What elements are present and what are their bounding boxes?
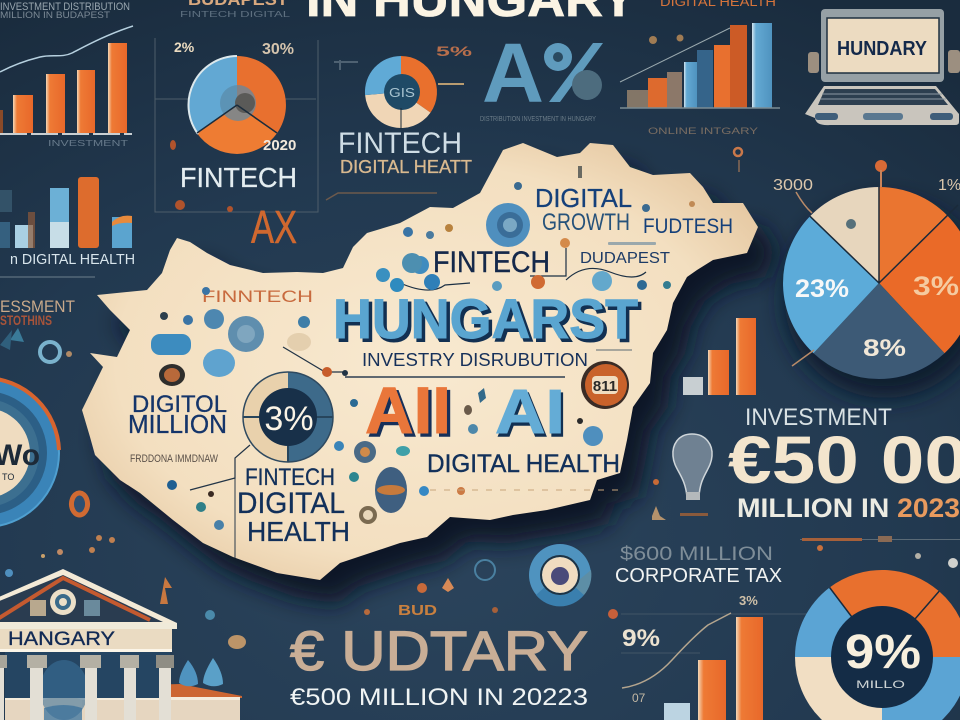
panel: fintech pie: 2% (174, 39, 195, 55)
fudtesh label: FUDTESH (643, 215, 733, 238)
finntech label: FINNTECH (202, 287, 313, 306)
text: corporate tax: $600 MILLION (620, 544, 773, 565)
donut chart: bottom right (795, 570, 960, 720)
callout: investment: €50 00 (728, 423, 960, 498)
entablature sign (0, 623, 177, 652)
left text block (0, 297, 75, 328)
pie labels: 3% (913, 271, 959, 301)
back building (5, 626, 242, 720)
pie labels: 23% (795, 275, 849, 303)
headline: budget: €500 MILLION IN 20223 (290, 684, 588, 711)
digital growth label (535, 183, 632, 236)
pie labels (773, 177, 960, 362)
icon: left round badge (0, 378, 59, 527)
fintech label upper: FINTECH (433, 246, 550, 279)
map heading: HUNGARST (336, 290, 641, 353)
callout: investment: INVESTMENT (745, 404, 892, 431)
panel: fintech donut: GIS (389, 85, 415, 100)
digital health label: DIGITAL HEALTH (427, 450, 620, 478)
donut chart: bottom right: MILLO (856, 679, 906, 691)
AI blue: AI (495, 378, 565, 447)
icon: temple building (0, 569, 242, 720)
icon: orange coin: 811 (593, 378, 617, 395)
pie chart: large right (773, 160, 960, 398)
digitol million label: DIGITOL (132, 391, 227, 418)
top small headings: FINTECH DIGITAL (180, 10, 291, 19)
pie labels: 3000 (773, 177, 813, 194)
AI blue: AI (497, 381, 567, 450)
3% donut (243, 372, 333, 462)
pediment (0, 569, 177, 628)
fintech digital health label (237, 464, 350, 547)
text: corporate tax: CORPORATE TAX (615, 565, 782, 587)
left text block: ESSMENT (0, 297, 75, 316)
bar chart: bottom right: 9% (622, 625, 660, 652)
icon: blue ring (486, 203, 530, 247)
bar chart: top right (620, 23, 780, 136)
small accents (0, 328, 960, 649)
fintech label: FINTECH (338, 127, 462, 160)
panel: fintech pie: 2020 (263, 137, 296, 154)
text: corporate tax (615, 544, 782, 587)
panel: fintech pie (155, 38, 318, 253)
digitol million label (128, 391, 227, 465)
budapest label: DUDAPEST (580, 250, 670, 267)
donut value: 9% (845, 626, 921, 679)
laptop screen text: HUNDARY (837, 38, 928, 60)
digitol million label: MILLION (128, 409, 227, 439)
bar chart: top left (0, 26, 133, 148)
callout: investment: MILLION IN 2023 (737, 493, 960, 523)
fintech digital health label: FINTECH (245, 464, 335, 491)
big A% mark: A (482, 26, 544, 120)
map drop shadow (100, 167, 776, 604)
icon: orange coin (581, 361, 629, 409)
bar chart: bottom right: 07 (632, 691, 646, 705)
label: digital health: n DIGITAL HEALTH (10, 251, 135, 268)
AI orange: AII (368, 376, 454, 450)
map subheading: INVESTRY DISRUBUTION (362, 350, 588, 370)
fintech digital health label: HEALTH (247, 516, 350, 547)
entablature sign: HANGARY (8, 629, 115, 650)
icon: laptop (805, 9, 960, 125)
digital growth label: GROWTH (542, 209, 630, 236)
headline: budget (290, 602, 588, 711)
panel: fintech donut: 5% (436, 43, 473, 59)
top small headings: INVESTMENT DISTRIBUTION (0, 1, 130, 13)
big A% mark (480, 26, 603, 123)
3% donut: 3% (264, 400, 314, 438)
map of Hungary (82, 143, 758, 580)
digital label: DIGITAL HEATT (340, 157, 472, 177)
digital growth label: DIGITAL (535, 183, 632, 213)
panel: fintech donut (326, 43, 473, 200)
digitol million label: FRDDONA IMMDNAW (130, 453, 218, 465)
map pins and connectors (151, 166, 695, 530)
panel: fintech pie: 30% (262, 41, 294, 58)
bar chart: top left: INVESTMENT (48, 139, 128, 148)
icon: circular target (529, 544, 591, 606)
AX mark: AX (251, 201, 297, 253)
headline: budget: € UDTARY (290, 619, 588, 682)
bar chart: middle right (683, 318, 756, 395)
fintech digital health label: DIGITAL (237, 487, 345, 520)
fintech label: FINTECH (180, 162, 297, 193)
pin icon (734, 148, 742, 172)
columns (0, 655, 174, 720)
icon: light bulb (653, 434, 712, 500)
pie chart (188, 56, 286, 154)
headline: budget: BUD (398, 602, 437, 619)
AI orange: AII (365, 373, 451, 447)
left text block: STOTHINS (0, 312, 52, 328)
big A% mark: DISTRIBUTION INVESTMENT IN HUNGARY (480, 116, 596, 123)
bar chart: bottom right: 3% (739, 593, 758, 608)
icon: left round badge: TO (2, 472, 14, 482)
top small headings (0, 0, 776, 20)
pie labels: 8% (863, 335, 906, 362)
callout: investment (728, 404, 960, 523)
map heading: HUNGARST (333, 287, 638, 350)
bar chart: top right: ONLINE INTGARY (648, 126, 758, 136)
top small headings: MILLION IN BUDAPEST (0, 10, 111, 20)
map land shape (82, 143, 758, 580)
bar chart: digital health (0, 177, 135, 268)
bar chart: bottom right (621, 593, 950, 720)
divider under chart (0, 276, 95, 278)
